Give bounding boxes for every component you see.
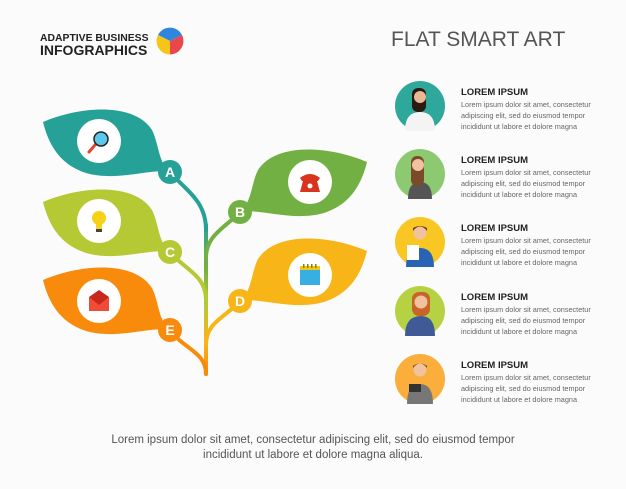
- item 2: incididunt ut labore et dolore magna: [461, 190, 578, 199]
- leaf E: [43, 267, 182, 342]
- item 1: Lorem ipsum dolor sit amet, consectetur: [461, 100, 591, 109]
- leaf B: [228, 149, 367, 224]
- item 4: [395, 286, 591, 336]
- icon: calendar: [300, 264, 320, 285]
- item 3: incididunt ut labore et dolore magna: [461, 258, 578, 267]
- icon: person 3: [406, 226, 434, 267]
- icon: logo pie: [157, 28, 183, 54]
- item 4: adipiscing elit, sed do eiusmod tempor: [461, 316, 586, 325]
- icon: person 4: [405, 292, 435, 336]
- leaf D: [228, 238, 367, 313]
- icon: phone: [300, 174, 320, 192]
- item 1: [395, 81, 591, 131]
- logo title: [40, 33, 149, 58]
- stem: [170, 172, 240, 374]
- item 2: [395, 149, 591, 199]
- icon: person 1: [405, 88, 435, 131]
- item 2: Lorem ipsum dolor sit amet, consectetur: [461, 168, 591, 177]
- logo title: ADAPTIVE BUSINESS: [40, 33, 149, 44]
- item 4: incididunt ut labore et dolore magna: [461, 327, 578, 336]
- icon: envelope: [89, 290, 109, 311]
- item 3: Lorem ipsum dolor sit amet, consectetur: [461, 236, 591, 245]
- icon: person 2: [408, 156, 432, 199]
- item 5: [395, 354, 591, 404]
- leaf D: D: [235, 293, 245, 309]
- item 5: incididunt ut labore et dolore magna: [461, 395, 578, 404]
- icon: magnifier: [89, 132, 108, 152]
- leaf C: [43, 189, 182, 264]
- leaf E: E: [165, 322, 175, 338]
- item 1: incididunt ut labore et dolore magna: [461, 122, 578, 131]
- heading: FLAT SMART ART: [391, 28, 565, 51]
- item 3: adipiscing elit, sed do eiusmod tempor: [461, 247, 586, 256]
- footer text: incididunt ut labore et dolore magna aliqua.: [203, 449, 423, 461]
- leaf A: [43, 109, 182, 184]
- leaf B: B: [235, 204, 245, 220]
- item 3: [395, 217, 591, 267]
- item 5: Lorem ipsum dolor sit amet, consectetur: [461, 373, 591, 382]
- item 1: LOREM IPSUM: [461, 87, 528, 98]
- item 2: adipiscing elit, sed do eiusmod tempor: [461, 179, 586, 188]
- leaf A: A: [165, 164, 175, 180]
- item 4: LOREM IPSUM: [461, 292, 528, 303]
- logo title: INFOGRAPHICS: [40, 42, 147, 58]
- leaf C: C: [165, 244, 175, 260]
- item 3: LOREM IPSUM: [461, 223, 528, 234]
- icon: person 5: [407, 364, 433, 404]
- item 2: LOREM IPSUM: [461, 155, 528, 166]
- item 5: LOREM IPSUM: [461, 360, 528, 371]
- item 5: adipiscing elit, sed do eiusmod tempor: [461, 384, 586, 393]
- item 4: Lorem ipsum dolor sit amet, consectetur: [461, 305, 591, 314]
- item 1: adipiscing elit, sed do eiusmod tempor: [461, 111, 586, 120]
- footer text: Lorem ipsum dolor sit amet, consectetur adipiscing elit, sed do eiusmod tempor: [111, 434, 515, 446]
- icon: lightbulb: [92, 211, 106, 232]
